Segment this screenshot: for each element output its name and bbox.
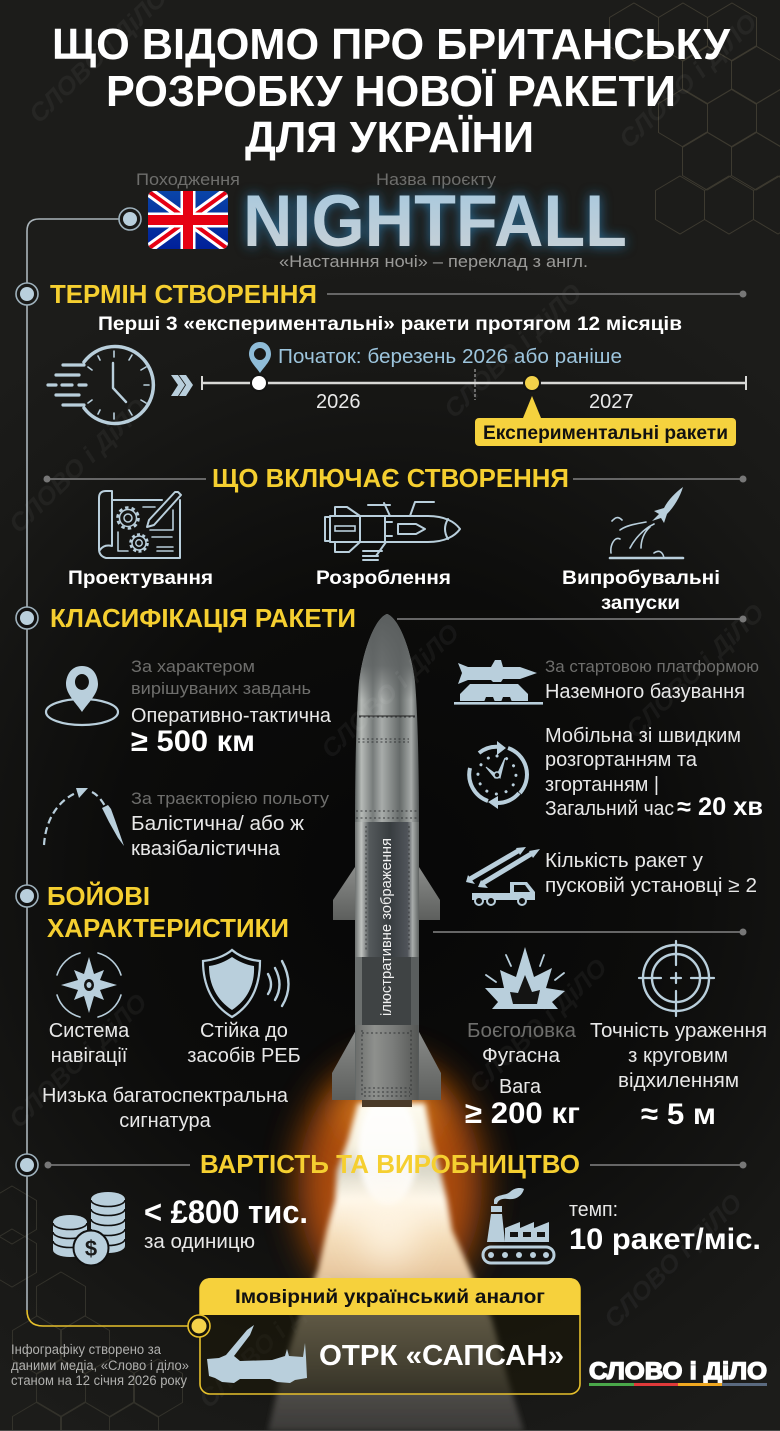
project name label: Назва проєкту — [376, 170, 497, 189]
icon: location pin — [46, 666, 118, 725]
task type: Оперативно-тактична — [131, 705, 332, 727]
label: test launches — [562, 568, 720, 614]
watermarks: СЛОВО і ДіЛО — [4, 393, 153, 539]
icon: missile development — [325, 502, 460, 560]
price: за одиницю — [144, 1231, 255, 1253]
source note: даними медіа, «Слово і діло» — [11, 1358, 189, 1373]
panel: creation term — [48, 281, 747, 446]
watermarks: СЛОВО і ДіЛО — [439, 278, 588, 424]
icon: launcher truck — [466, 847, 540, 905]
heading rule — [433, 928, 746, 936]
signature text: Низька багатоспектральна — [42, 1085, 289, 1107]
mobility text: ≈ 20 хв — [677, 793, 763, 821]
mobility text: Загальний час — [545, 798, 674, 820]
illustrative caption: ілюстративне зображення — [378, 838, 395, 1016]
task type — [131, 657, 332, 758]
panel: origin and project name — [136, 170, 627, 271]
panel: ukrainian analogue — [188, 1278, 580, 1394]
year 2026: 2026 — [316, 391, 360, 413]
warhead: ≥ 200 кг — [465, 1097, 580, 1130]
icon: Sapsan launcher — [207, 1325, 307, 1383]
icon: deployment clock — [469, 741, 527, 809]
panel: combat characteristics — [42, 881, 767, 1132]
signature text: сигнатура — [119, 1110, 212, 1132]
icon: factory — [483, 1188, 554, 1263]
rocket body — [355, 614, 419, 1100]
trajectory type: За траєкторією польоту — [131, 789, 330, 808]
accuracy — [590, 1020, 767, 1131]
heading: ВАРТІСТЬ ТА ВИРОБНИЦТВО — [200, 1151, 580, 1179]
dark panel — [362, 957, 411, 1025]
icon: start pin — [249, 342, 271, 373]
icon: target — [639, 941, 714, 1016]
accuracy: з круговим — [628, 1045, 728, 1067]
icon: coins — [53, 1192, 125, 1266]
rockets per launcher: пусковій установці ≥ 2 — [545, 875, 757, 897]
icon: shield with waves — [203, 950, 288, 1017]
label: test launches: Випробувальні — [562, 568, 720, 589]
source note — [11, 1342, 189, 1388]
lower hull section — [355, 822, 419, 957]
watermarks: СЛОВО і ДіЛО — [614, 8, 763, 154]
origin label: Походження — [136, 170, 240, 189]
production rate: темп: — [569, 1199, 618, 1221]
timeline — [202, 369, 747, 400]
heading: ТЕРМІН СТВОРЕННЯ — [50, 281, 317, 309]
price: < £800 тис. — [144, 1194, 308, 1230]
icon: UK flag — [148, 191, 228, 249]
upper fins — [333, 867, 358, 920]
heading: КЛАСИФІКАЦІЯ РАКЕТИ — [50, 605, 356, 633]
task type: За характером — [131, 657, 255, 676]
hexagon pattern top right — [610, 3, 780, 234]
card body — [200, 1279, 580, 1394]
label: development: Розроблення — [316, 568, 451, 589]
launch platform — [545, 657, 759, 703]
hexagon pattern bottom left — [0, 1186, 182, 1431]
watermarks: СЛОВО і ДіЛО — [464, 953, 613, 1099]
connector line — [27, 219, 188, 1326]
navigation text: навігації — [51, 1045, 128, 1067]
nozzle — [362, 1100, 412, 1107]
heading rules — [44, 1162, 746, 1168]
jamming resistance text: Стійка до — [200, 1020, 288, 1042]
heading: ЩО ВКЛЮЧАЄ СТВОРЕННЯ — [212, 465, 569, 493]
icon: coins: $ — [85, 1236, 97, 1261]
lower fins — [332, 1030, 358, 1100]
task type: ≥ 500 км — [131, 725, 255, 758]
rockets per launcher: Кількість ракет у — [545, 850, 703, 872]
header text: Імовірний український аналог — [235, 1287, 545, 1308]
mobility text: згортанням | — [545, 774, 659, 796]
analogue name: ОТРК «САПСАН» — [319, 1340, 564, 1372]
source note: Інфографіку створено за — [11, 1342, 161, 1357]
panel: missile classification — [44, 605, 763, 905]
warhead — [465, 1020, 580, 1130]
trajectory type: квазібалістична — [131, 838, 281, 860]
trajectory type — [131, 789, 330, 860]
production rate: 10 ракет/міс. — [569, 1223, 761, 1256]
navigation text: Система — [49, 1020, 130, 1042]
callout: experimental rockets: Експериментальні ракети — [483, 423, 728, 444]
mobility text: розгортанням та — [545, 749, 698, 771]
heading rules — [44, 476, 746, 482]
title: РОЗРОБКУ НОВОЇ РАКЕТИ — [106, 67, 676, 116]
rivet rows — [356, 717, 418, 1096]
watermarks: СЛОВО і ДіЛО — [599, 1188, 748, 1334]
icon: ground launcher — [454, 660, 543, 705]
project name: NIGHTFALL — [243, 181, 627, 262]
source note: станом на 12 січня 2026 року — [11, 1373, 187, 1388]
navigation text — [49, 1020, 130, 1067]
jamming resistance text — [187, 1020, 301, 1067]
jamming resistance text: засобів РЕБ — [187, 1045, 301, 1067]
icon: test launch — [610, 487, 683, 558]
heading rule — [327, 290, 746, 298]
panel: cost and production — [44, 1151, 761, 1266]
icon: fast clock — [48, 347, 153, 423]
engine section — [356, 1025, 418, 1100]
accuracy: ≈ 5 м — [641, 1098, 716, 1131]
task type: вирішуваних завдань — [131, 679, 311, 698]
mobility text: Мобільна зі швидким — [545, 725, 741, 747]
callout: experimental rockets — [475, 396, 736, 446]
rocket exhaust plume — [268, 1060, 524, 1431]
nose seam — [359, 715, 415, 717]
watermarks: СЛОВО і ДіЛО — [4, 988, 153, 1134]
rockets per launcher — [545, 850, 757, 897]
title: ЩО ВІДОМО ПРО БРИТАНСЬКУ — [52, 20, 731, 69]
rocket illustration — [332, 614, 441, 1107]
watermarks: СЛОВО і ДіЛО — [194, 1268, 343, 1414]
panel: what creation includes — [44, 465, 746, 614]
year 2027: 2027 — [589, 391, 634, 413]
warhead: Боєголовка — [467, 1020, 577, 1042]
icon: blueprint — [99, 491, 181, 558]
icon: navigation compass — [57, 953, 121, 1017]
title: ДЛЯ УКРАЇНИ — [245, 113, 534, 162]
start label: Початок: березень 2026 або раніше — [278, 346, 622, 368]
watermarks: СЛОВО і ДіЛО — [621, 598, 770, 744]
launch platform: Наземного базування — [545, 681, 745, 703]
warhead: Вага — [499, 1076, 542, 1098]
timeline nodes — [16, 208, 141, 1176]
heading — [47, 881, 289, 943]
label: design: Проектування — [68, 568, 213, 589]
heading: ХАРАКТЕРИСТИКИ — [47, 915, 289, 943]
subtitle: Перші 3 «експериментальні» ракети протягом 12 місяців — [98, 314, 682, 335]
mobility text — [545, 725, 763, 821]
title — [52, 20, 731, 162]
heading: БОЙОВІ — [47, 881, 150, 911]
accuracy: відхиленням — [618, 1070, 739, 1092]
production rate — [569, 1199, 761, 1256]
icon: chevrons — [171, 375, 193, 396]
nose shading — [358, 614, 416, 700]
label: test launches: запуски — [601, 593, 680, 614]
launch platform: За стартовою платформою — [545, 657, 759, 676]
node — [188, 1315, 210, 1337]
signature text — [42, 1085, 289, 1132]
logo: СЛОВО і ДіЛО — [589, 1358, 767, 1385]
icon: trajectory — [44, 788, 124, 846]
accuracy: Точність ураження — [590, 1020, 767, 1042]
card header — [200, 1278, 580, 1315]
heading rule — [397, 616, 746, 622]
warhead: Фугасна — [482, 1045, 561, 1067]
icon: explosion — [485, 947, 565, 1009]
watermarks: СЛОВО і ДіЛО — [316, 618, 465, 764]
trajectory type: Балістична/ або ж — [131, 813, 305, 835]
translation note: «Настанння ночі» – переклад з англ. — [279, 252, 588, 271]
price — [144, 1194, 308, 1253]
